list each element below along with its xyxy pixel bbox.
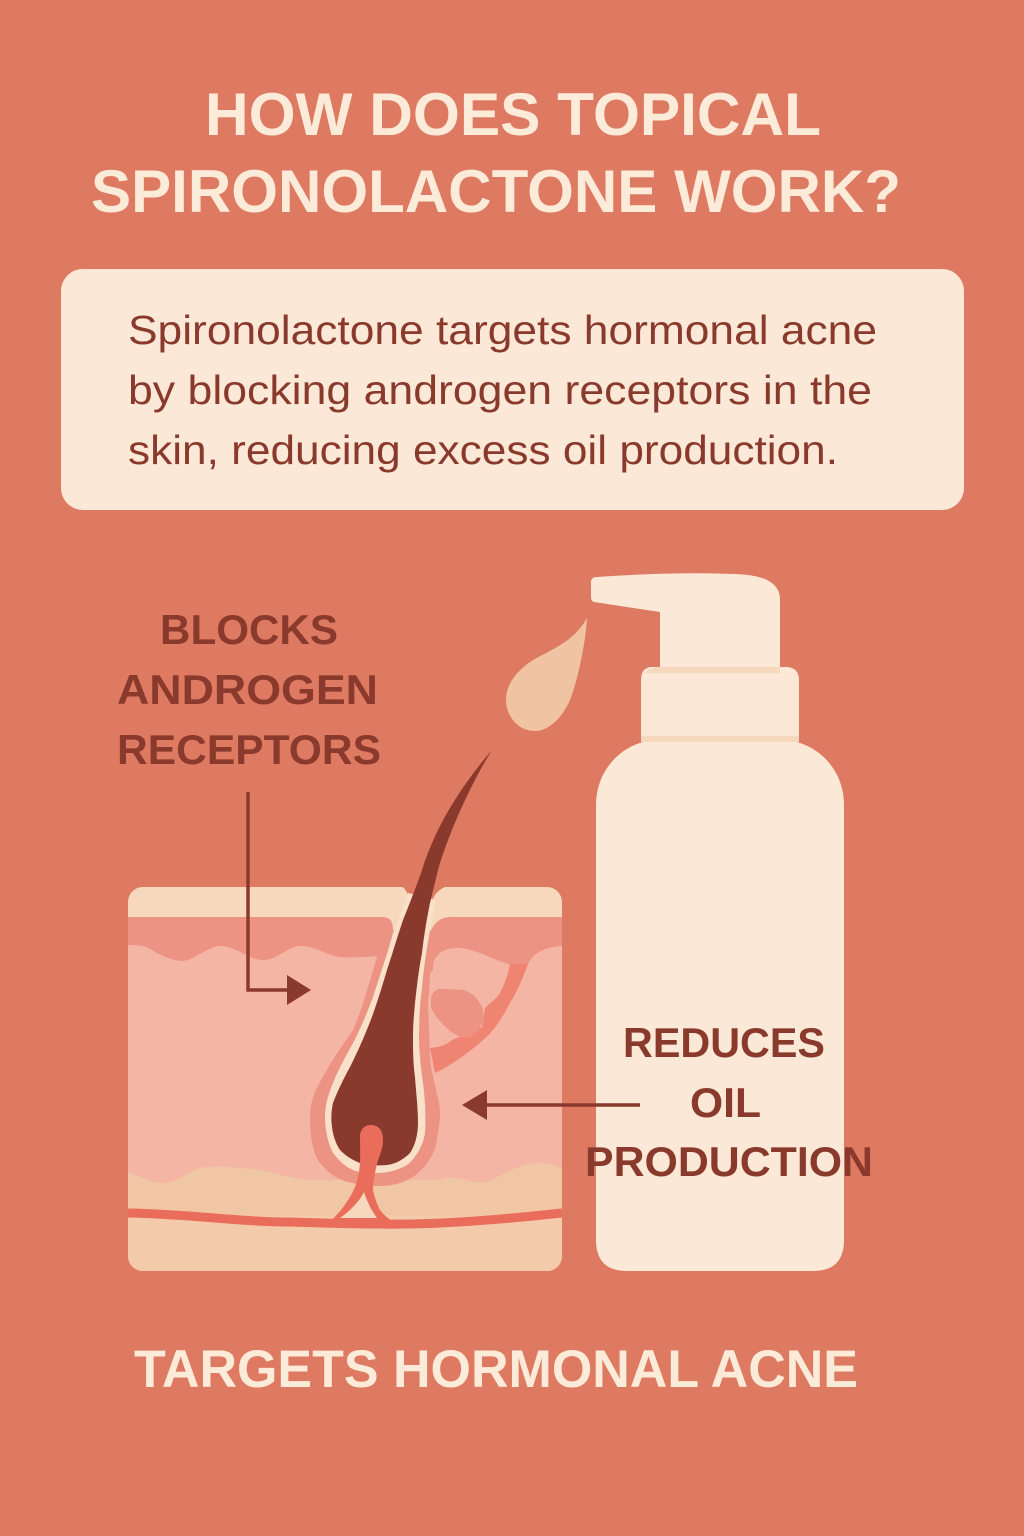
blood vessel and papilla bbox=[128, 1125, 562, 1224]
label: blocks androgen receptors bbox=[117, 606, 381, 773]
skin: pink layer left bbox=[128, 917, 393, 965]
label: blocks androgen receptors: BLOCKS bbox=[160, 606, 338, 653]
footer heading: TARGETS HORMONAL ACNE bbox=[134, 1340, 858, 1399]
sebaceous gland bbox=[431, 989, 483, 1037]
icon: droplet bbox=[506, 618, 587, 731]
skin: dermis right bbox=[400, 946, 562, 1195]
follicle inner cream lining bbox=[325, 893, 436, 1173]
panel: intro text bbox=[61, 269, 964, 510]
blood vessel bbox=[128, 1213, 562, 1224]
skin: notch around hair bbox=[402, 887, 444, 900]
skin: pink layer right bbox=[428, 917, 562, 975]
papilla with branches bbox=[332, 1125, 390, 1220]
panel: intro text: by blocking androgen receptors in the bbox=[128, 367, 872, 413]
vessel base gap bbox=[340, 1192, 377, 1218]
skin: fat layer bbox=[128, 1163, 562, 1271]
skin: surface layer bbox=[128, 887, 562, 1271]
title: HOW DOES TOPICAL bbox=[205, 81, 821, 148]
label: reduces oil production: REDUCES bbox=[623, 1019, 825, 1066]
sebaceous duct bbox=[430, 964, 528, 1073]
label: blocks androgen receptors: ANDROGEN bbox=[117, 666, 378, 713]
label: reduces oil production bbox=[585, 1019, 873, 1185]
arrow: to follicle bbox=[462, 1090, 640, 1120]
skin: dermis left bbox=[128, 945, 377, 1195]
icon: pump bottle bbox=[591, 573, 844, 1271]
label: reduces oil production: OIL bbox=[690, 1079, 761, 1126]
title: SPIRONOLACTONE WORK? bbox=[91, 158, 901, 225]
panel: intro text: Spironolactone targets hormonal acne bbox=[128, 307, 877, 353]
panel: intro text: skin, reducing excess oil production. bbox=[128, 427, 838, 473]
follicle sheath bbox=[310, 930, 440, 1186]
label: reduces oil production: PRODUCTION bbox=[585, 1138, 873, 1185]
title bbox=[91, 81, 901, 225]
skin cross-section bbox=[128, 884, 562, 1271]
arrow: to dermis bbox=[248, 792, 311, 1005]
hair shaft bbox=[331, 750, 492, 1165]
skin: lower layer bbox=[128, 1258, 562, 1271]
label: blocks androgen receptors: RECEPTORS bbox=[117, 726, 381, 773]
